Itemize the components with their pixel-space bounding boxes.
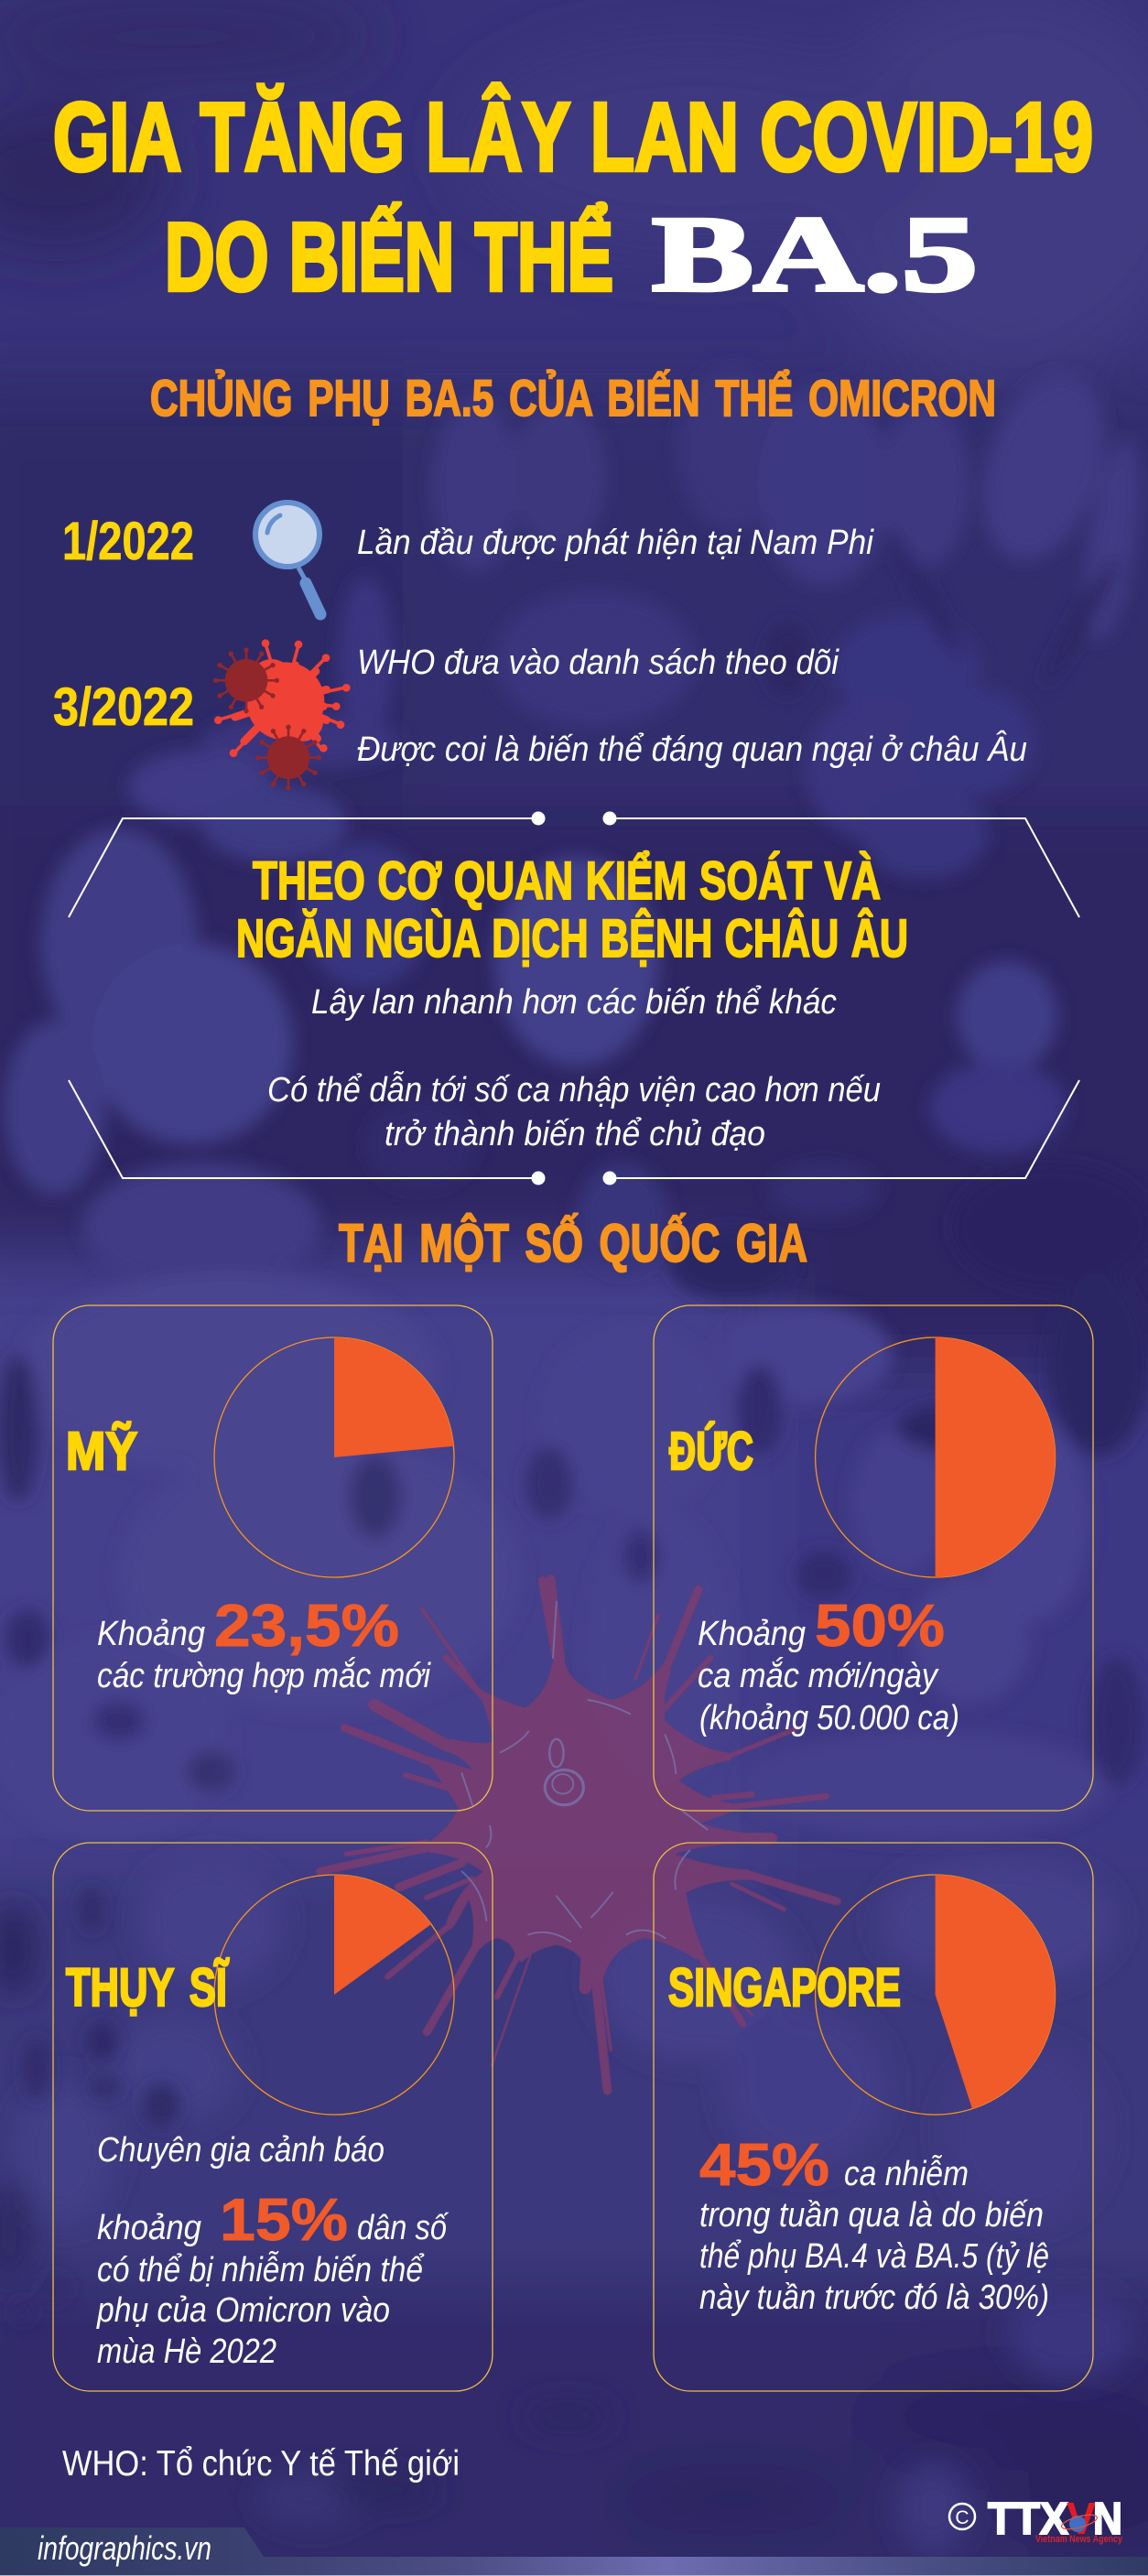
site name: infographics.vn (38, 2529, 211, 2567)
ECDC statements: trở thành biến thể chủ đạo (384, 1115, 765, 1153)
date 3/2022: 3/2022 (53, 677, 194, 737)
stat text (96, 2131, 449, 2371)
icon: red virus cluster (216, 644, 347, 788)
panel: Germany (654, 1305, 1093, 1811)
ECDC heading (236, 851, 908, 969)
country label: THỤY SĨ (66, 1958, 230, 2018)
title: DO BIẾN THỂ (165, 203, 613, 311)
text: first detected: Lần đầu được phát hiện tại Nam Phi (357, 524, 874, 562)
stat text: khoảng (97, 2209, 201, 2247)
ECDC heading: NGĂN NGÙA DỊCH BỆNH CHÂU ÂU (236, 909, 908, 969)
logo: TTXVN: V (1067, 2495, 1096, 2544)
country label: MỸ (66, 1422, 137, 1481)
stat text: ca mắc mới/ngày (698, 1656, 939, 1695)
logo: TTXVN: Vietnam News Agency (1035, 2534, 1123, 2545)
stat text: dân số (357, 2209, 449, 2247)
pie chart 23.5% (214, 1337, 454, 1577)
stat text (698, 1592, 959, 1737)
country-section lobes (18, 1272, 439, 1474)
panel: Switzerland (53, 1843, 493, 2391)
logo: TTXVN (949, 2495, 1123, 2545)
pie chart 15% (214, 1875, 454, 2115)
stat text: thể phụ BA.4 và BA.5 (tỷ lệ (699, 2237, 1049, 2276)
pie chart 45% (816, 1875, 1056, 2115)
text: variant of concern: Được coi là biến thể đáng quan ngại ở châu Âu (357, 730, 1027, 769)
stat text: phụ của Omicron vào (96, 2291, 390, 2330)
central maroon virus illustration (320, 1578, 837, 2091)
copyright mark: C (955, 2507, 969, 2528)
footnote: WHO: WHO: Tổ chức Y tế Thế giới (62, 2444, 460, 2484)
stat text: có thể bị nhiễm biến thể (97, 2249, 425, 2289)
footer bar (0, 2527, 1148, 2576)
title (53, 82, 1093, 314)
title: BA.5 (652, 194, 978, 314)
stat text: Chuyên gia cảnh báo (97, 2131, 384, 2170)
stat text: này tuần trước đó là 30%) (699, 2278, 1049, 2317)
logo: TTXVN: TTX (988, 2495, 1068, 2544)
ECDC statements: Lây lan nhanh hơn các biến thể khác (311, 983, 837, 1022)
country label: ĐỨC (669, 1422, 753, 1481)
virus surface streaks (462, 1602, 707, 1942)
hexagon frame (69, 811, 1079, 1185)
body outline with flared spike bases (427, 1658, 752, 1985)
pie chart 50% (816, 1337, 1056, 1577)
panel: USA (53, 1305, 493, 1811)
stat text: 45% (699, 2131, 829, 2198)
icon: magnifier (255, 503, 320, 614)
copyright mark (949, 2504, 975, 2529)
stat text (97, 1592, 431, 1695)
stat text: Khoảng (698, 1615, 806, 1653)
stat text: 15% (220, 2186, 348, 2253)
country label: SINGAPORE (668, 1958, 901, 2018)
ECDC statements (267, 983, 881, 1153)
panel: Singapore (654, 1843, 1093, 2391)
ECDC heading: THEO CƠ QUAN KIỂM SOÁT VÀ (253, 851, 881, 911)
stat text (699, 2131, 1049, 2317)
text: WHO watch list: WHO đưa vào danh sách theo dõi (357, 644, 839, 682)
stat text: trong tuần qua là do biến (699, 2196, 1044, 2235)
stat text: mùa Hè 2022 (97, 2332, 276, 2371)
section heading: countries: TẠI MỘT SỐ QUỐC GIA (339, 1214, 807, 1273)
stat text: Khoảng (97, 1615, 205, 1653)
date 1/2022: 1/2022 (62, 512, 194, 571)
stat text: 23,5% (214, 1592, 399, 1659)
timeline (53, 503, 1027, 788)
stat text: ca nhiễm (844, 2153, 969, 2193)
stat text: (khoảng 50.000 ca) (699, 1699, 959, 1737)
middle lobes (41, 828, 197, 1057)
lower mottled spots (81, 1887, 103, 1931)
stat text: các trường hợp mắc mới (97, 1656, 431, 1695)
stat text: 50% (815, 1592, 945, 1659)
ECDC statements: Có thể dẫn tới số ca nhập viện cao hơn nếu (267, 1070, 881, 1109)
logo: TTXVN: N (1093, 2495, 1122, 2544)
upper virus lobes (432, 398, 520, 572)
